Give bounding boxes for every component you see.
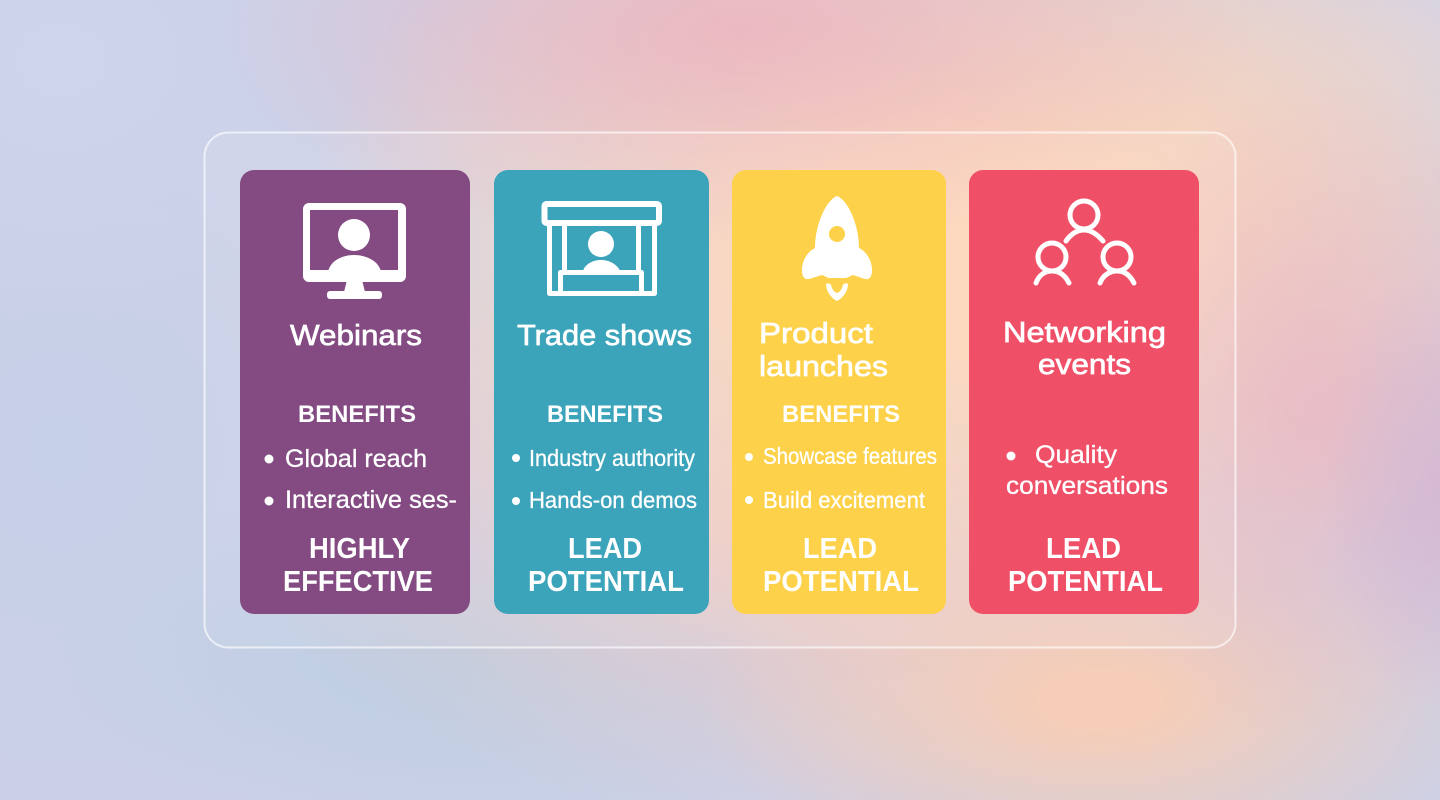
icon: trade show booth bbox=[544, 204, 659, 294]
benefits heading: BENEFITS bbox=[298, 401, 416, 428]
effectiveness label bbox=[283, 533, 433, 598]
lead potential label bbox=[1008, 533, 1163, 598]
benefit list: Global reach bbox=[285, 445, 427, 473]
benefit list: Build excitement bbox=[763, 487, 926, 513]
card: Networking events bbox=[969, 170, 1199, 614]
benefit list: Interactive ses- bbox=[285, 486, 457, 514]
icon: three connected people bbox=[1036, 201, 1134, 283]
benefits heading: BENEFITS bbox=[547, 401, 663, 428]
icon: monitor with presenter bbox=[303, 203, 406, 299]
title: events bbox=[1038, 349, 1131, 381]
title: Webinars bbox=[290, 320, 422, 352]
title bbox=[759, 318, 888, 383]
card background bbox=[969, 170, 1199, 614]
card background bbox=[240, 170, 470, 614]
title: launches bbox=[759, 351, 888, 383]
benefit list: Quality bbox=[1035, 441, 1118, 469]
benefit list bbox=[512, 445, 697, 513]
benefit list: Industry authority bbox=[529, 445, 695, 471]
title bbox=[1003, 317, 1166, 381]
lead potential label: POTENTIAL bbox=[763, 566, 919, 598]
title: Networking bbox=[1003, 317, 1166, 349]
card: Trade shows bbox=[494, 170, 709, 614]
lead potential label bbox=[528, 533, 684, 598]
benefit list: conversations bbox=[1006, 472, 1168, 500]
card: Product launches bbox=[732, 170, 946, 614]
title: Product bbox=[759, 318, 873, 350]
glass panel bbox=[204, 132, 1236, 648]
benefit list bbox=[264, 445, 457, 514]
benefit list bbox=[745, 443, 937, 513]
card: Webinars bbox=[240, 170, 470, 614]
card background bbox=[732, 170, 946, 614]
lead potential label: LEAD bbox=[1046, 533, 1121, 565]
benefit list bbox=[1006, 441, 1168, 500]
effectiveness label: HIGHLY bbox=[309, 533, 410, 565]
lead potential label: POTENTIAL bbox=[1008, 566, 1163, 598]
lead potential label: LEAD bbox=[568, 533, 642, 565]
benefit list: Hands-on demos bbox=[529, 487, 697, 513]
benefits heading: BENEFITS bbox=[782, 401, 900, 428]
icon: rocket bbox=[802, 196, 872, 301]
lead potential label: LEAD bbox=[803, 533, 877, 565]
benefit list: Showcase features bbox=[763, 443, 937, 469]
card background bbox=[494, 170, 709, 614]
lead potential label bbox=[763, 533, 919, 598]
title: Trade shows bbox=[517, 320, 692, 352]
lead potential label: POTENTIAL bbox=[528, 566, 684, 598]
effectiveness label: EFFECTIVE bbox=[283, 566, 433, 598]
